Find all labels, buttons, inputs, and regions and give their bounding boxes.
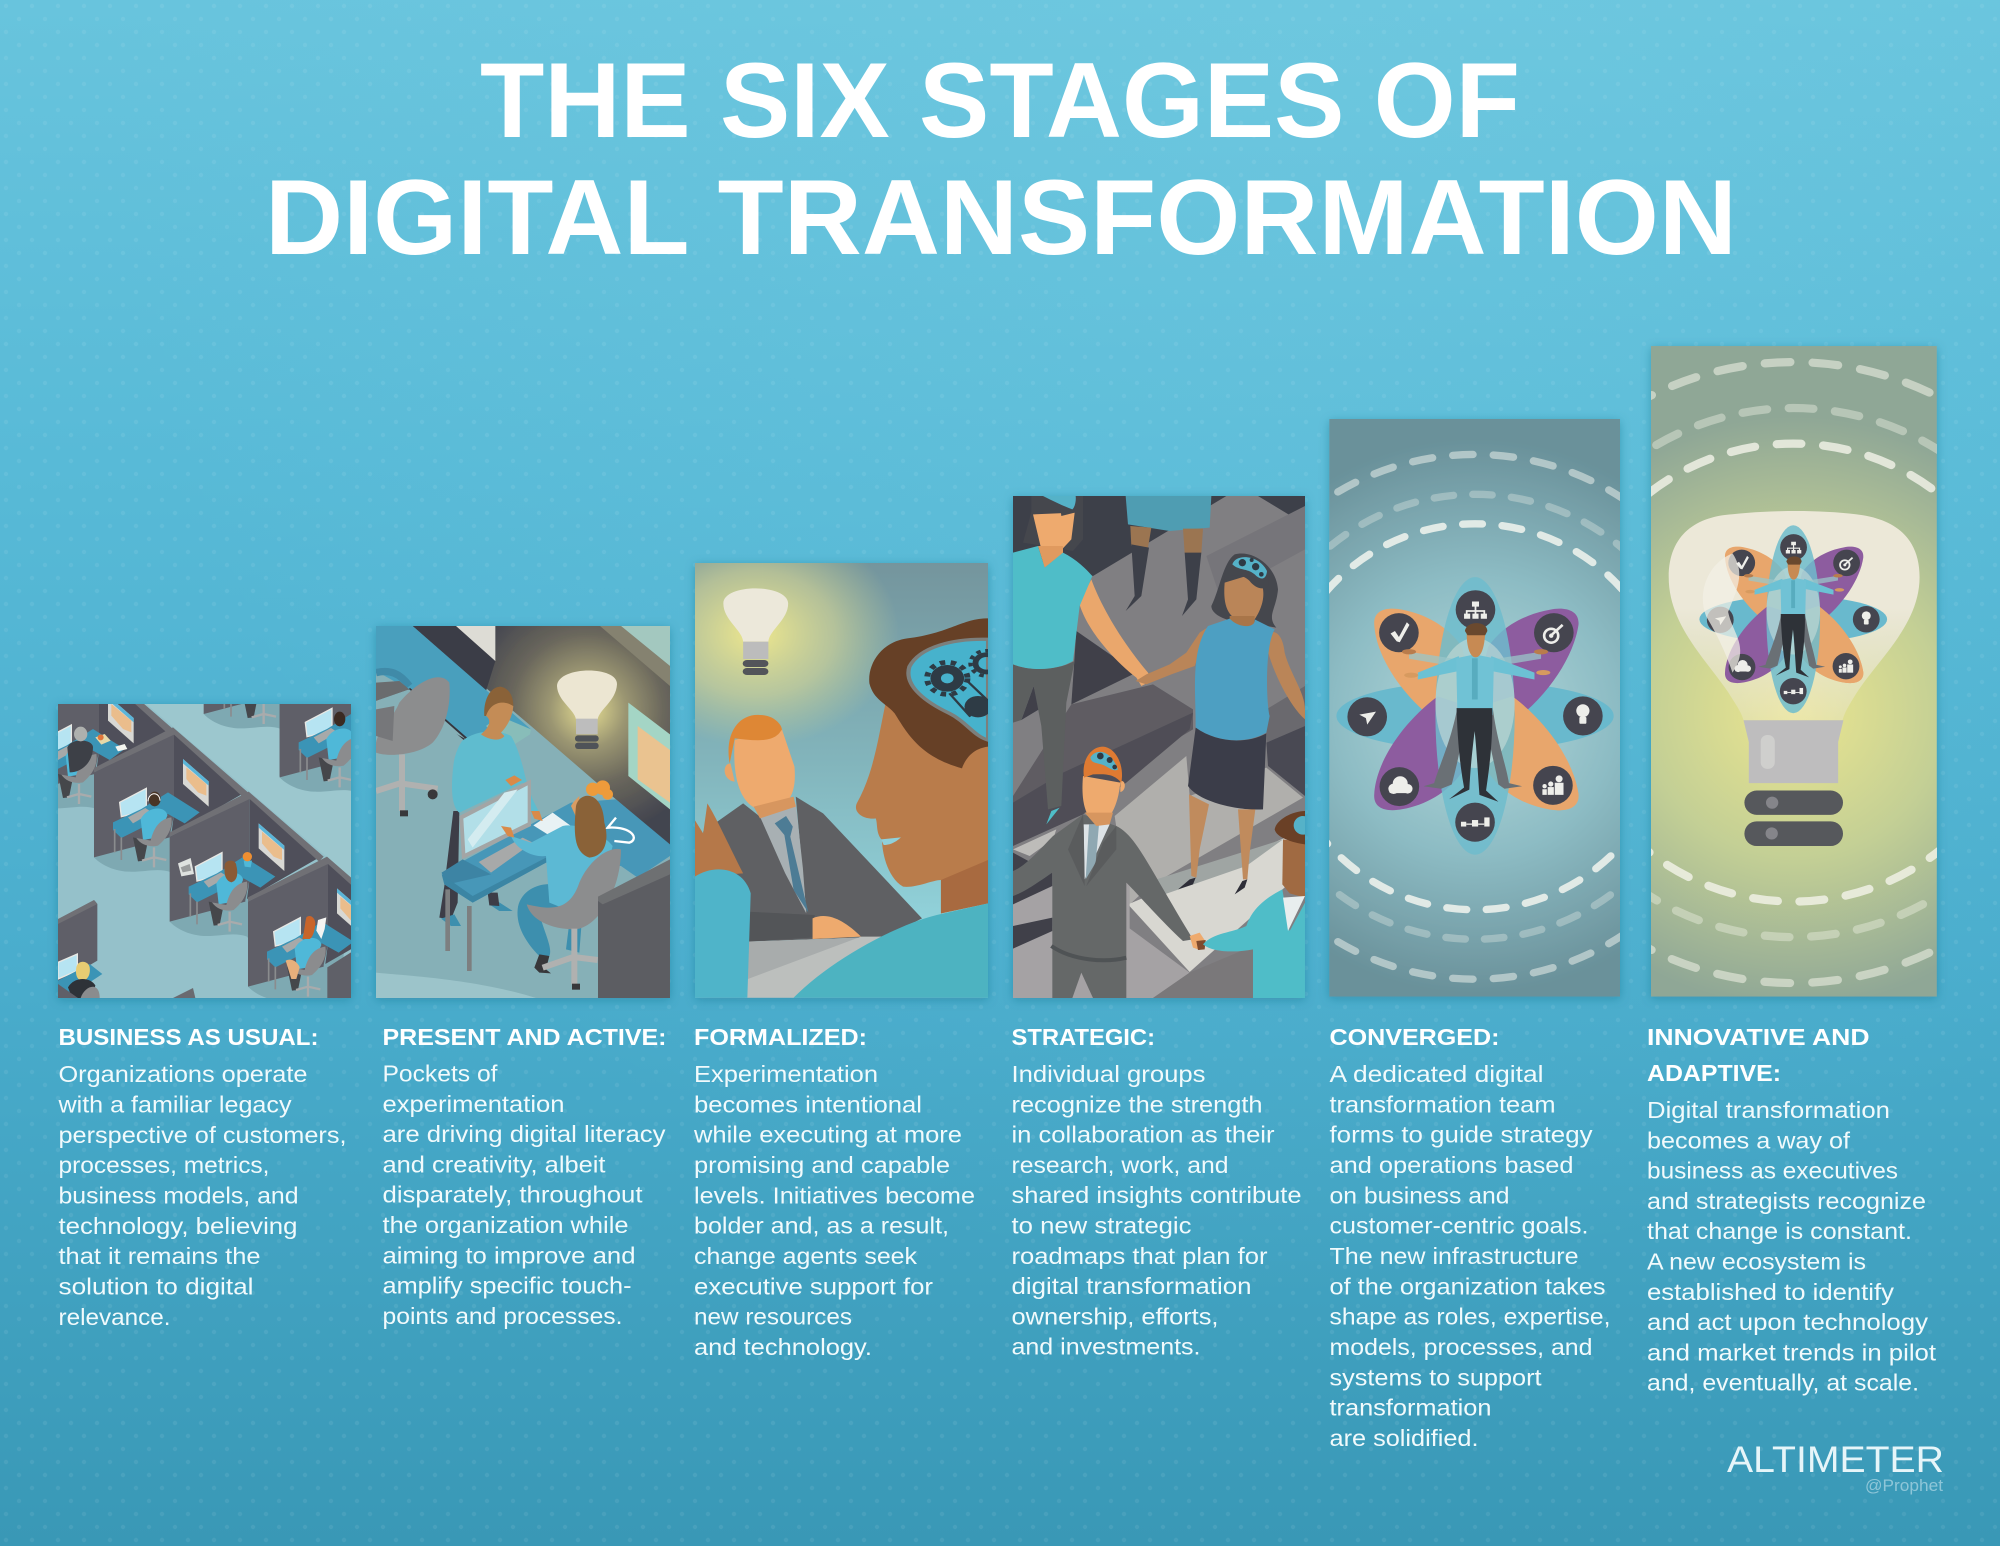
- stage text: converged: The new infrastructure: [1330, 1243, 1578, 1269]
- title: [265, 40, 1737, 277]
- stage text: converged: transformation: [1330, 1395, 1492, 1421]
- stage text: business as usual: relevance.: [58, 1304, 170, 1330]
- stage text: present and active: aiming to improve and: [382, 1242, 636, 1268]
- title: DIGITAL TRANSFORMATION: [265, 157, 1737, 277]
- stage text: business as usual: solution to digital: [58, 1274, 254, 1300]
- stage text: converged: A dedicated digital: [1330, 1061, 1544, 1087]
- stage text: converged: [1330, 1024, 1610, 1451]
- stage text: converged: systems to support: [1330, 1364, 1542, 1390]
- title: THE SIX STAGES OF: [480, 40, 1520, 160]
- stage text: formalized: change agents seek: [694, 1243, 917, 1269]
- stage text: innovative and adaptive: becomes a way of: [1647, 1127, 1850, 1153]
- stage text: formalized: FORMALIZED:: [694, 1024, 867, 1050]
- stage text: present and active: PRESENT AND ACTIVE:: [382, 1024, 666, 1050]
- stage text: innovative and adaptive: and strategists recognize: [1647, 1188, 1926, 1214]
- stage text: present and active: the organization while: [382, 1212, 628, 1238]
- stage text: strategic: and investments.: [1012, 1334, 1200, 1360]
- dashed arcs: [1329, 450, 1620, 983]
- stage text: innovative and adaptive: ADAPTIVE:: [1647, 1060, 1781, 1086]
- panel: strategic illustration: [1013, 496, 1312, 998]
- stage text: present and active: disparately, throughout: [382, 1182, 643, 1208]
- stage text: strategic: STRATEGIC:: [1012, 1024, 1155, 1050]
- stage text: business as usual: BUSINESS AS USUAL:: [58, 1024, 318, 1050]
- stage text: innovative and adaptive: and act upon technology: [1647, 1309, 1928, 1335]
- stage text: innovative and adaptive: and, eventually, at scale.: [1647, 1370, 1919, 1396]
- stage text: present and active: [382, 1024, 666, 1329]
- stage text: strategic: shared insights contribute: [1012, 1182, 1302, 1208]
- stage text: strategic: [1012, 1024, 1302, 1360]
- stage text: converged: are solidified.: [1330, 1425, 1478, 1451]
- stage text: business as usual: processes, metrics,: [58, 1152, 270, 1178]
- panel: business as usual illustration: [55, 703, 354, 1003]
- stage text: formalized: new resources: [694, 1304, 852, 1330]
- stage text: formalized: [693, 1024, 975, 1360]
- dashed arcs: [1651, 358, 1937, 988]
- stage text: present and active: are driving digital literacy: [382, 1121, 666, 1147]
- stage text: converged: forms to guide strategy: [1330, 1122, 1593, 1148]
- stage text: converged: and operations based: [1330, 1152, 1574, 1178]
- stage text: strategic: ownership, efforts,: [1012, 1303, 1218, 1329]
- icon: light bulb: [1669, 511, 1920, 846]
- stage text: formalized: bolder and, as a result,: [694, 1213, 949, 1239]
- stage text: innovative and adaptive: Digital transformation: [1647, 1097, 1890, 1123]
- stage text: present and active: amplify specific touch-: [382, 1273, 632, 1299]
- logo: Altimeter @Prophet: ALTIMETER: [1727, 1439, 1944, 1480]
- stage text: innovative and adaptive: established to identify: [1647, 1279, 1894, 1305]
- stage text: formalized: becomes intentional: [694, 1091, 922, 1117]
- stage text: strategic: digital transformation: [1012, 1273, 1252, 1299]
- logo: Altimeter @Prophet: [1727, 1439, 1944, 1495]
- stage text: business as usual: technology, believing: [58, 1213, 298, 1239]
- stage text: converged: customer-centric goals.: [1330, 1213, 1588, 1239]
- stage text: strategic: in collaboration as their: [1012, 1122, 1275, 1148]
- stage text: business as usual: perspective of customers,: [58, 1122, 346, 1148]
- stage text: converged: transformation team: [1330, 1091, 1556, 1117]
- stage text: business as usual: business models, and: [58, 1182, 298, 1208]
- stage text: present and active: and creativity, albeit: [382, 1151, 606, 1177]
- stage text: formalized: while executing at more: [693, 1122, 962, 1148]
- stage text: business as usual: Organizations operate: [58, 1061, 308, 1087]
- stage text: innovative and adaptive: business as executives: [1647, 1158, 1898, 1184]
- stage text: formalized: Experimentation: [694, 1061, 878, 1087]
- panel: formalized illustration: [695, 563, 1002, 998]
- stage text: converged: on business and: [1330, 1182, 1510, 1208]
- panel: present and active illustration: [376, 626, 670, 998]
- stage text: formalized: levels. Initiatives become: [694, 1182, 975, 1208]
- stage text: present and active: experimentation: [382, 1091, 564, 1117]
- stage text: formalized: promising and capable: [694, 1152, 950, 1178]
- stage text: strategic: roadmaps that plan for: [1012, 1243, 1268, 1269]
- stage text: business as usual: that it remains the: [58, 1243, 260, 1269]
- stage text: converged: CONVERGED:: [1330, 1024, 1500, 1050]
- stage text: innovative and adaptive: A new ecosystem is: [1647, 1248, 1866, 1274]
- stage text: converged: of the organization takes: [1330, 1273, 1606, 1299]
- panel: innovative and adaptive illustration: [1647, 344, 1940, 1002]
- stage text: innovative and adaptive: that change is constant.: [1647, 1218, 1912, 1244]
- stage text: converged: shape as roles, expertise,: [1330, 1304, 1610, 1330]
- stage text: present and active: points and processes.: [382, 1303, 622, 1329]
- stage text: strategic: to new strategic: [1012, 1212, 1192, 1238]
- stage text: business as usual: [57, 1024, 346, 1330]
- stage text: innovative and adaptive: and market trends in pilot: [1647, 1339, 1937, 1365]
- stage text: strategic: research, work, and: [1012, 1152, 1228, 1178]
- stage text: formalized: and technology.: [694, 1334, 872, 1360]
- stage text: innovative and adaptive: [1647, 1024, 1937, 1396]
- stage text: business as usual: with a familiar legacy: [57, 1091, 292, 1117]
- stage text: innovative and adaptive: INNOVATIVE AND: [1647, 1024, 1870, 1050]
- stage text: present and active: Pockets of: [382, 1060, 498, 1086]
- logo: Altimeter @Prophet: @Prophet: [1865, 1476, 1943, 1495]
- panel: converged illustration: [1326, 417, 1624, 1002]
- stage text: converged: models, processes, and: [1330, 1334, 1592, 1360]
- stage text: formalized: executive support for: [694, 1273, 933, 1299]
- stage text: strategic: Individual groups: [1012, 1061, 1206, 1087]
- stage text: strategic: recognize the strength: [1012, 1091, 1262, 1117]
